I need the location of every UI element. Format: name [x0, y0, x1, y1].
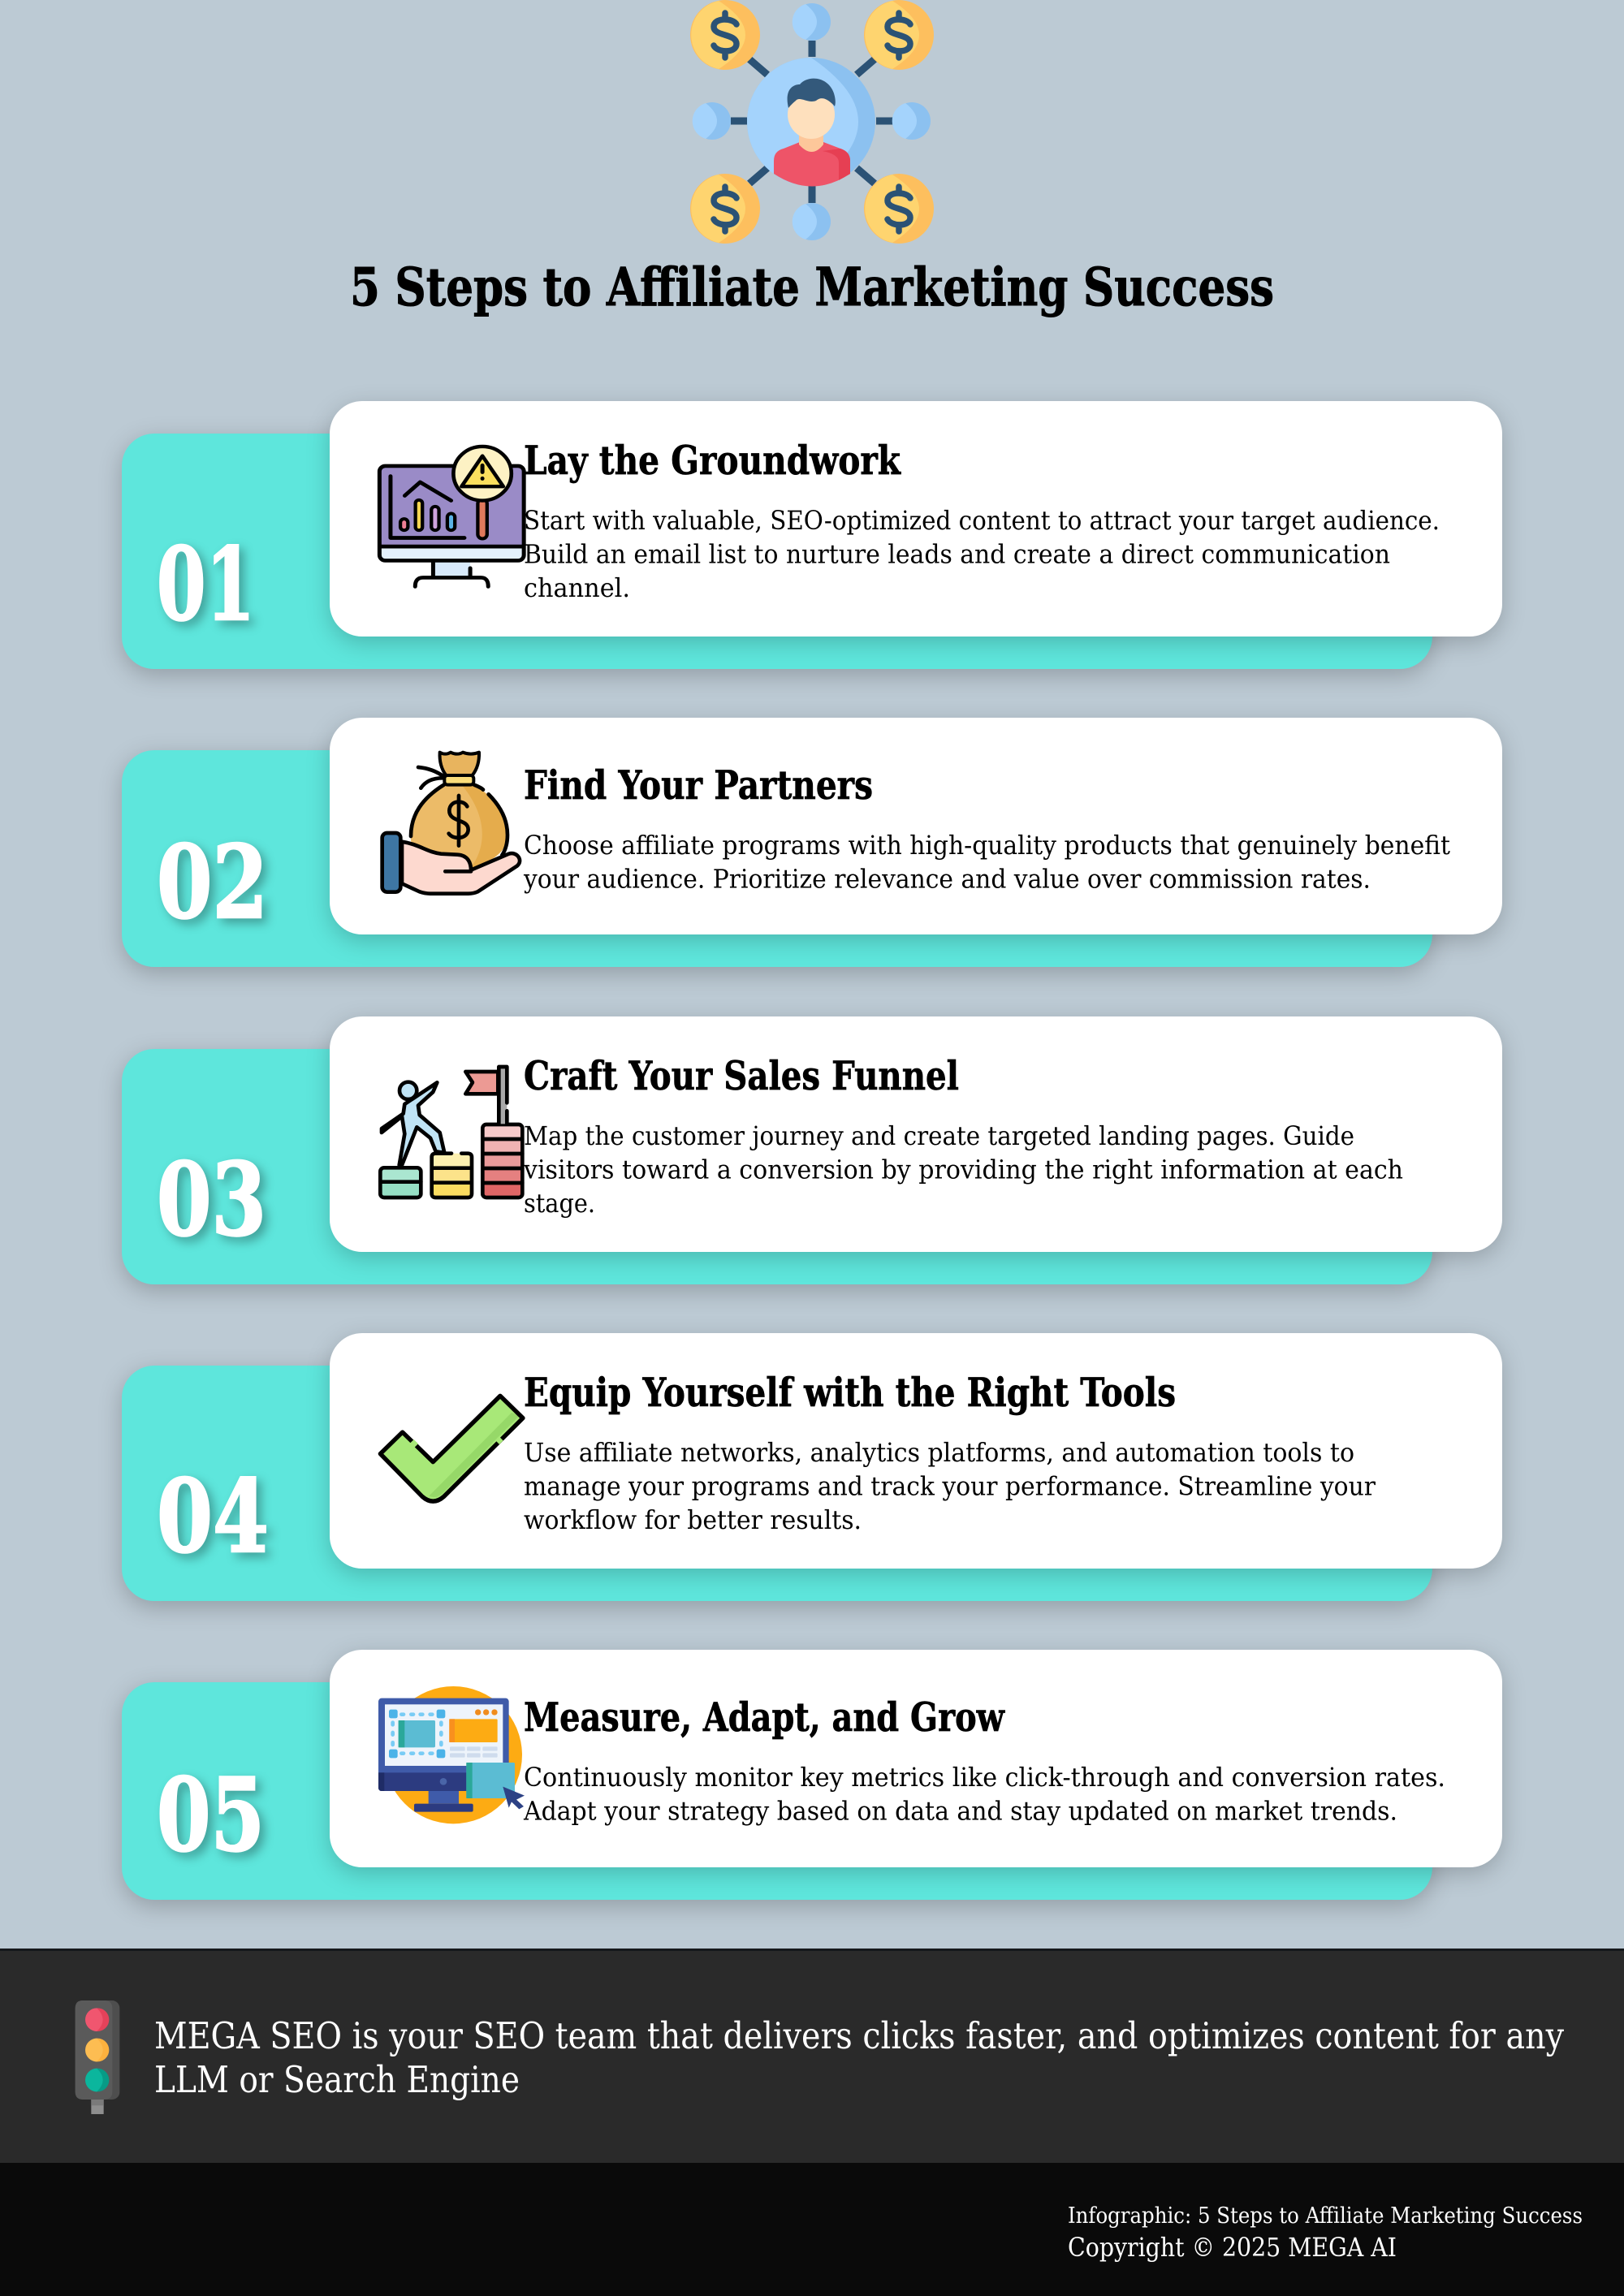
panel: step 04 — [122, 1333, 1502, 1601]
step 01 heading: Lay the Groundwork — [524, 437, 901, 484]
step 01 card — [330, 401, 1502, 637]
step 04 number: 04 — [157, 1458, 269, 1576]
icon: affiliate network — [690, 0, 934, 244]
step 05 card — [330, 1650, 1502, 1867]
step 04 heading: Equip Yourself with the Right Tools — [524, 1369, 1176, 1416]
panel: step 03 — [122, 1016, 1502, 1284]
step 02 number: 02 — [157, 824, 268, 942]
copyright text: Copyright © 2025 MEGA AI — [1068, 2232, 1397, 2263]
step 05 body text — [523, 1762, 1445, 1827]
step 02 number tab — [122, 750, 1432, 967]
icon: traffic light — [76, 2000, 119, 2114]
panel: step 02 — [122, 718, 1502, 967]
step 03 number: 03 — [157, 1142, 266, 1259]
step 02 card — [330, 718, 1502, 934]
promo text: LLM or Search Engine — [154, 2058, 520, 2101]
icon: money bag in hand — [382, 753, 520, 894]
step 04 body text — [524, 1437, 1376, 1535]
panel: step 01 — [122, 401, 1502, 669]
step 02 body text: your audience. Prioritize relevance and value over commission rates. — [523, 864, 1371, 895]
title: 5 Steps to Affiliate Marketing Success — [350, 257, 1274, 318]
step 01 body text — [524, 505, 1440, 603]
icon: web design monitor — [378, 1686, 525, 1823]
copyright text: Infographic: 5 Steps to Affiliate Marketing Success — [1068, 2203, 1583, 2229]
icon: monitor with warning magnifier — [379, 447, 524, 586]
step 01 body text: Build an email list to nurture leads and create a direct communication — [524, 539, 1390, 570]
step 04 body text: workflow for better results. — [524, 1504, 862, 1535]
step 03 body text — [523, 1120, 1403, 1219]
step 01 body text: Start with valuable, SEO-optimized content to attract your target audience. — [524, 505, 1440, 536]
copyright text — [1068, 2203, 1583, 2263]
step 03 heading: Craft Your Sales Funnel — [524, 1052, 959, 1099]
step 02 body text: Choose affiliate programs with high-quality products that genuinely benefit — [524, 830, 1450, 861]
step 05 body text: Adapt your strategy based on data and stay updated on market trends. — [523, 1796, 1397, 1827]
promo text — [154, 2014, 1564, 2101]
step 03 number tab — [122, 1049, 1432, 1284]
step 05 number: 05 — [157, 1757, 265, 1875]
step 05 number tab — [122, 1682, 1432, 1900]
panel: copyright bar — [0, 2163, 1624, 2296]
step 03 body text: Map the customer journey and create targeted landing pages. Guide — [524, 1120, 1354, 1151]
panel: promo footer — [0, 1949, 1624, 2163]
step 01 number tab — [122, 434, 1432, 669]
step 03 card — [330, 1016, 1502, 1252]
step 05 body text: Continuously monitor key metrics like click-through and conversion rates. — [524, 1762, 1445, 1793]
step 04 number tab — [122, 1366, 1432, 1601]
step 02 body text — [523, 830, 1450, 895]
step 01 body text: channel. — [524, 572, 630, 603]
step 03 body text: stage. — [524, 1188, 595, 1219]
icon: check mark — [380, 1396, 523, 1501]
step 03 body text: visitors toward a conversion by providing the right information at each — [523, 1154, 1403, 1185]
step 01 number: 01 — [157, 526, 255, 644]
step 04 card — [330, 1333, 1502, 1569]
step 02 heading: Find Your Partners — [524, 762, 873, 809]
panel: step 05 — [122, 1650, 1502, 1900]
step 05 heading: Measure, Adapt, and Grow — [524, 1694, 1005, 1741]
step 04 body text: manage your programs and track your performance. Streamline your — [524, 1471, 1376, 1502]
step 04 body text: Use affiliate networks, analytics platforms, and automation tools to — [524, 1437, 1354, 1468]
icon: climbing to flag — [380, 1066, 522, 1198]
